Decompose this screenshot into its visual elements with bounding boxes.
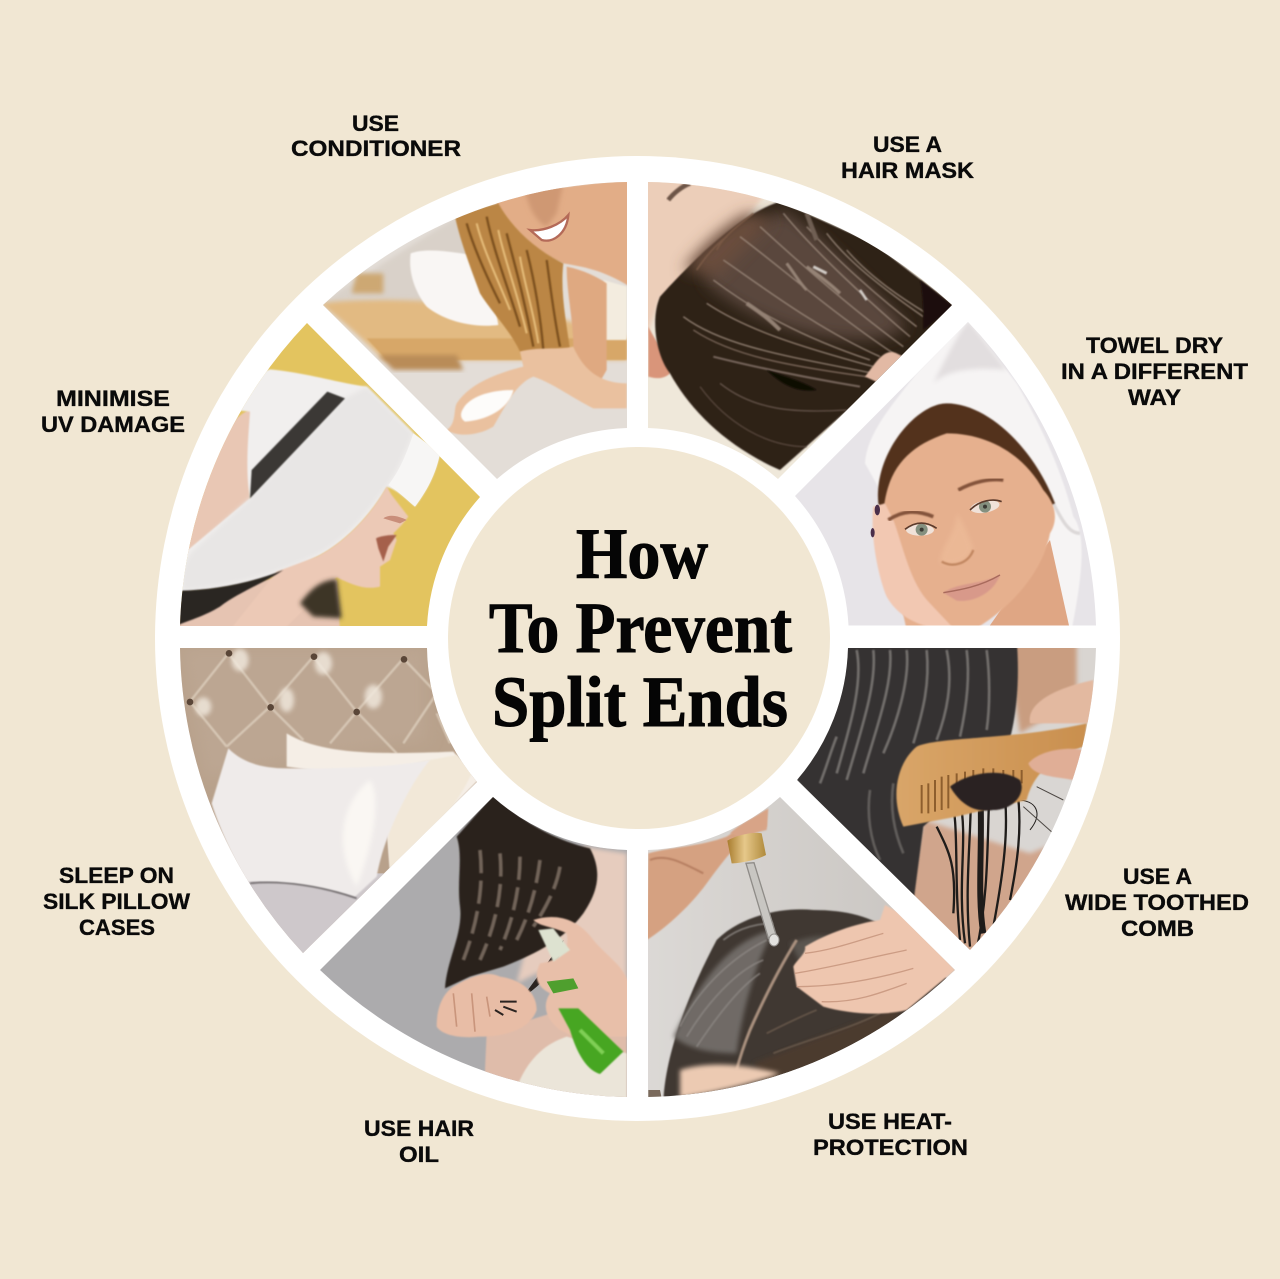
label: use a hair mask: USE A xyxy=(873,132,942,157)
label: use heat-protection xyxy=(813,1109,968,1160)
label: minimise uv damage: UV DAMAGE xyxy=(41,412,185,437)
title: Split Ends xyxy=(492,662,788,742)
label: sleep on silk pillow cases: CASES xyxy=(79,915,155,940)
label: sleep on silk pillow cases xyxy=(43,863,191,940)
label: use heat-protection: USE HEAT- xyxy=(828,1109,952,1134)
panel: wide toothed comb photo xyxy=(797,648,1096,950)
panel: use a hair mask photo xyxy=(648,182,952,479)
panel: minimise uv damage photo xyxy=(180,323,480,626)
label: use hair oil: OIL xyxy=(399,1142,439,1167)
label: sleep on silk pillow cases: SLEEP ON xyxy=(59,863,174,888)
panel: use heat protection photo xyxy=(648,797,955,1097)
label: towel dry in a different way: IN A DIFFERENT xyxy=(1061,359,1248,384)
label: use hair oil: USE HAIR xyxy=(364,1116,474,1141)
panel: silk pillow cases photo xyxy=(180,648,477,953)
label: use heat-protection: PROTECTION xyxy=(813,1135,968,1160)
title: To Prevent xyxy=(489,588,792,668)
label: minimise uv damage: MINIMISE xyxy=(56,386,170,411)
title: How xyxy=(576,514,708,594)
label: towel dry in a different way: TOWEL DRY xyxy=(1086,333,1223,358)
label: use a wide toothed comb: WIDE TOOTHED xyxy=(1065,890,1249,915)
label: use a wide toothed comb: COMB xyxy=(1121,916,1194,941)
label: use conditioner xyxy=(291,111,461,161)
panel: towel dry photo xyxy=(795,322,1096,626)
label: use a hair mask xyxy=(841,132,975,183)
label: towel dry in a different way xyxy=(1061,333,1248,410)
label: use conditioner: USE xyxy=(352,111,399,136)
panel: use conditioner photo xyxy=(323,182,627,479)
label: use a wide toothed comb xyxy=(1065,864,1249,941)
center circle xyxy=(448,447,830,829)
label: use conditioner: CONDITIONER xyxy=(291,136,461,161)
label: use hair oil xyxy=(364,1116,474,1167)
label: towel dry in a different way: WAY xyxy=(1128,385,1181,410)
white wheel ring xyxy=(155,156,1120,1121)
label: use a wide toothed comb: USE A xyxy=(1123,864,1192,889)
label: minimise uv damage xyxy=(41,386,185,437)
panel: use hair oil photo xyxy=(320,797,627,1097)
title xyxy=(489,514,792,742)
label: use a hair mask: HAIR MASK xyxy=(841,158,975,183)
label: sleep on silk pillow cases: SILK PILLOW xyxy=(43,889,191,914)
